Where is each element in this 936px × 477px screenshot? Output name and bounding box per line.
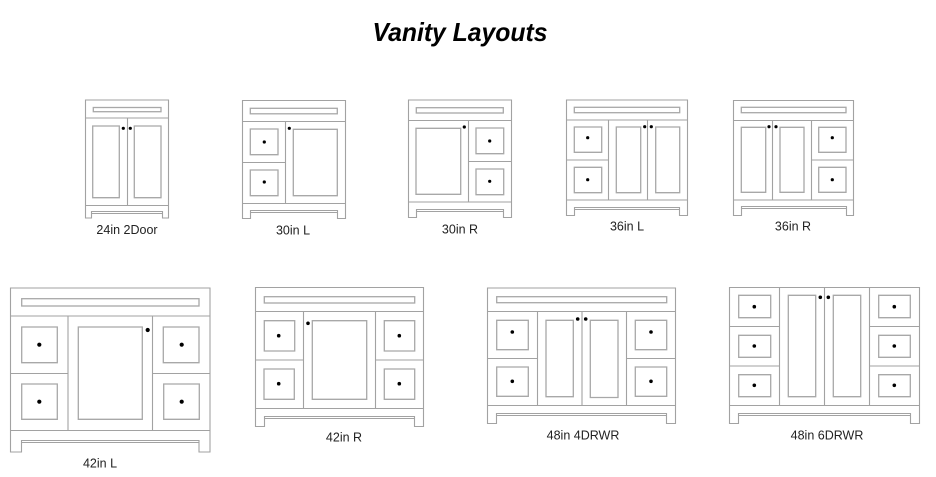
label: 24in 2Door [96,223,158,237]
drawers and door panel [22,327,199,419]
vanity: 30in L [242,100,346,238]
vanity: 42in R [256,288,424,444]
knobs [752,296,896,387]
door panel and drawers [416,128,504,195]
knobs [263,127,291,184]
knobs [277,322,401,386]
top rail [741,107,846,113]
vanity: 42in L [10,288,210,470]
door panels and drawers [741,127,846,192]
cabinet outline with base [256,288,424,426]
label: 30in R [442,222,478,236]
drawers and door panels [497,320,667,398]
vanity: 36in R [734,100,854,234]
cabinet outline with base [408,100,512,218]
top rail [250,108,337,114]
knobs [37,328,184,404]
drawers and door panel [264,321,415,399]
cabinet outline with base [730,288,920,424]
drawers and door panels [574,127,680,193]
top rail [264,297,415,303]
knobs [767,125,834,181]
label: 42in R [326,430,362,444]
vanity: 48in 6DRWR [730,288,920,442]
cabinet outline with base [86,100,168,218]
top rail [497,297,667,303]
label: 48in 6DRWR [791,428,863,442]
knobs [463,125,491,183]
label: 30in L [276,224,310,238]
label: 42in L [83,456,117,470]
drawers and door panels [739,295,910,397]
label: 36in L [610,220,644,234]
title: Vanity Layouts [372,17,548,47]
top rail [416,108,503,113]
cabinet outline with base [242,100,346,218]
cabinet outline with base [488,288,676,424]
cabinet outline with base [566,100,688,216]
vanity: 30in R [408,100,512,236]
door panels [93,126,161,198]
vanity: 36in L [566,100,688,234]
label: 48in 4DRWR [547,428,619,442]
top rail [574,107,680,113]
door knobs [122,127,132,130]
drawers and door panel [250,129,337,196]
top rail [93,108,161,112]
cabinet outline with base [10,288,210,452]
knobs [586,125,653,181]
vanity: 48in 4DRWR [488,288,676,442]
vanity: 24in 2Door [86,100,168,237]
knobs [510,317,653,383]
label: 36in R [775,220,811,234]
top rail [22,299,199,306]
cabinet outline with base [734,100,854,216]
